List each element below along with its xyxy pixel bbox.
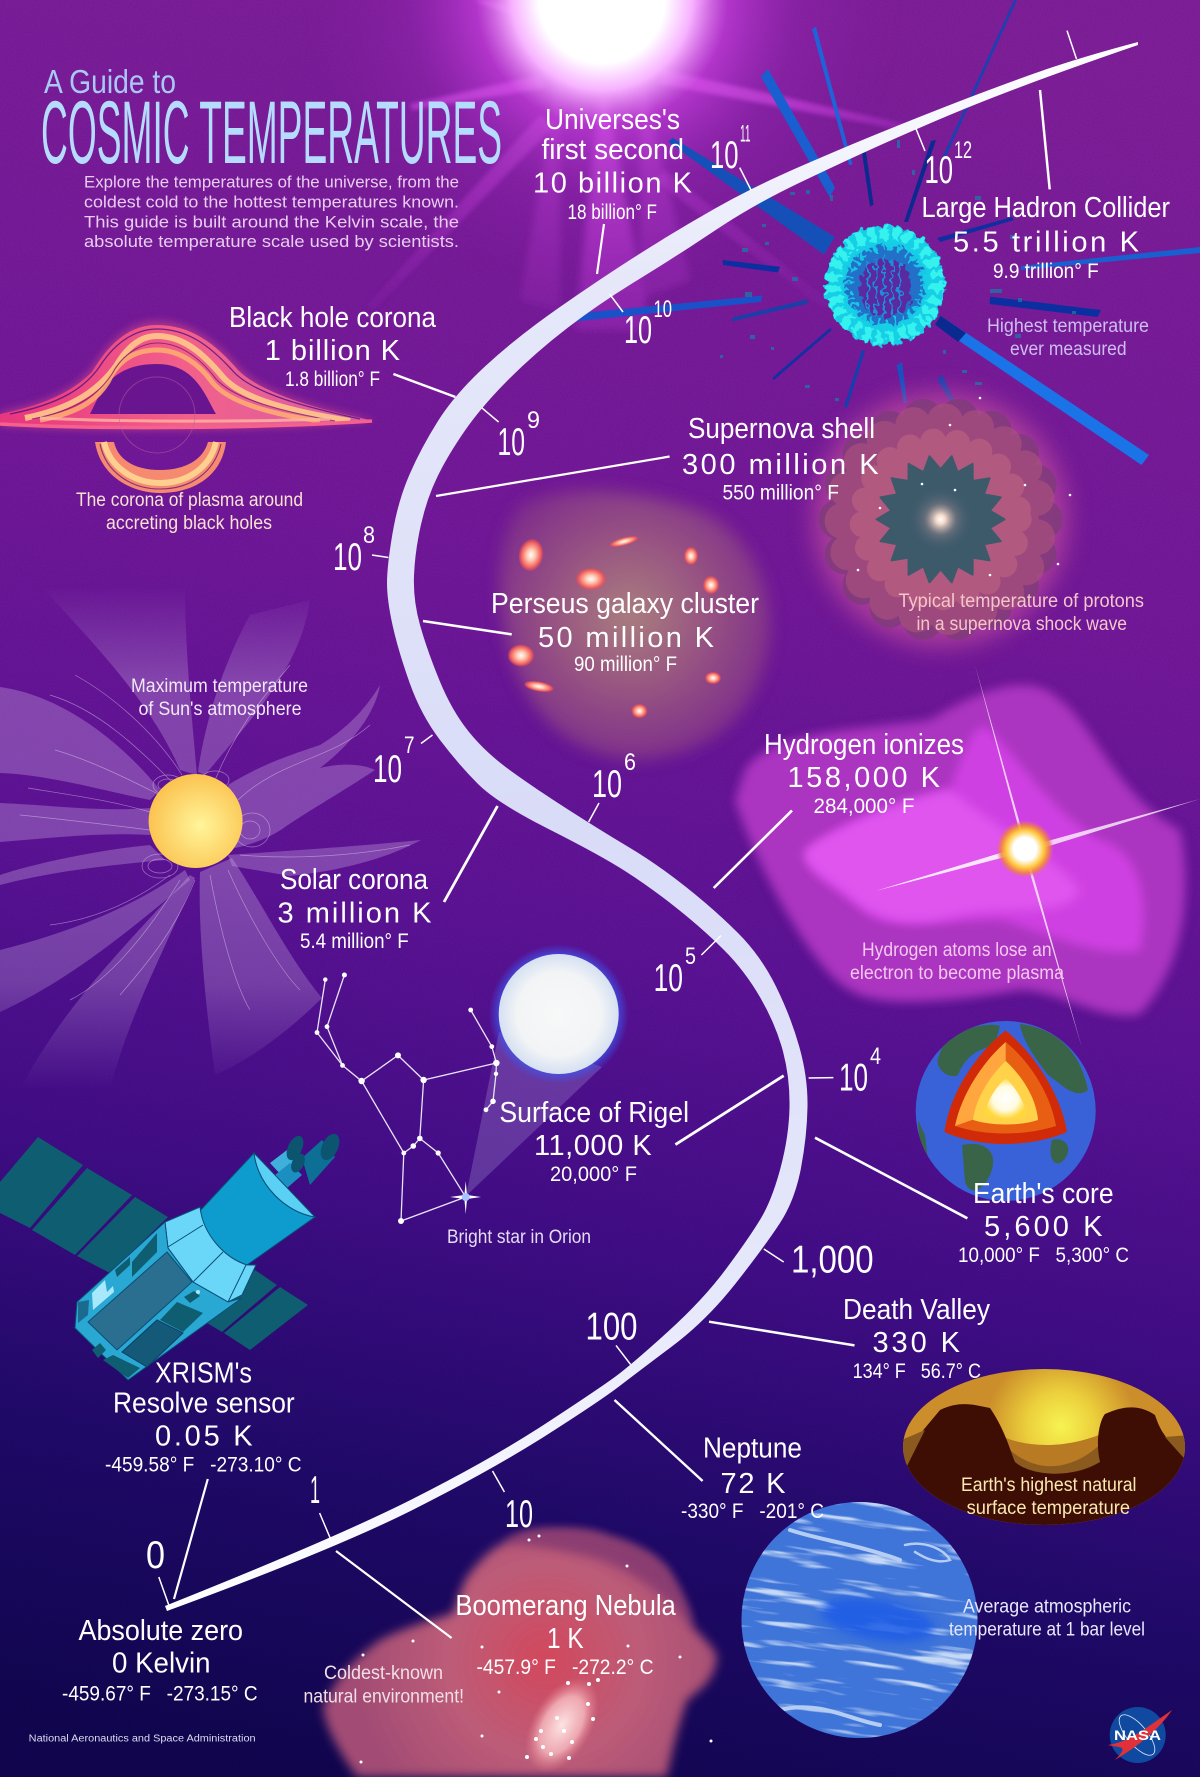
callout: hydrogen ionizes xyxy=(764,729,1064,984)
caption: bright star in Orion: Bright star in Orion xyxy=(447,1227,591,1248)
scale mark: 10^8: 8 xyxy=(363,522,375,549)
scale mark: 10^6: 10 xyxy=(592,763,622,806)
callout: Universe's first second: 18 billion° F xyxy=(568,201,657,224)
leader line: hydrogen ionizes xyxy=(714,810,792,888)
caption xyxy=(987,316,1149,360)
callout: supernova shell: Supernova shell xyxy=(688,413,875,445)
scale mark: 100: 100 xyxy=(586,1306,638,1349)
callout: absolute zero: -459.67° F -273.15° C xyxy=(62,1682,258,1706)
scale mark: 10^9: 9 xyxy=(527,407,540,434)
scale mark: 10^4 xyxy=(809,1043,881,1100)
scale mark: 10^6 xyxy=(589,749,636,822)
caption: temperature at 1 bar level xyxy=(949,1620,1145,1640)
illustration: solar corona and sun xyxy=(0,585,421,1090)
scale mark: 10^5: 5 xyxy=(685,943,696,970)
scale mark: 10^12 with top tick: 10 xyxy=(924,149,953,192)
leader line: Neptune xyxy=(614,1400,703,1481)
caption: ever measured xyxy=(1010,339,1127,360)
callout: Death Valley xyxy=(843,1294,1136,1519)
glare: bright light at the top of the scale xyxy=(302,0,905,330)
caption: natural environment! xyxy=(304,1686,464,1708)
callout: Boomerang Nebula: Boomerang Nebula xyxy=(455,1590,677,1622)
callout: solar corona: 5.4 million° F xyxy=(300,930,409,953)
illustration: Large Hadron Collider particle burst xyxy=(570,0,1200,465)
scale mark: 100 xyxy=(586,1306,638,1364)
title line: A Guide to: A Guide to xyxy=(44,63,176,100)
caption: in a supernova shock wave xyxy=(916,614,1127,635)
callout: XRISM Resolve sensor: Resolve sensor xyxy=(113,1388,295,1420)
callout: Perseus galaxy cluster xyxy=(491,588,759,676)
text: 11 xyxy=(740,121,750,148)
telescope cylinder xyxy=(201,1153,315,1265)
scale mark: 10^11: 10 xyxy=(710,134,738,177)
galaxies xyxy=(508,534,721,718)
callout: supernova shell: 550 million° F xyxy=(722,482,839,504)
scale mark: 10^7 xyxy=(373,732,432,791)
caption: The corona of plasma around xyxy=(76,490,303,511)
caption: Hydrogen atoms lose an xyxy=(862,940,1052,961)
callout: Neptune xyxy=(681,1432,1145,1640)
caption: electron to become plasma xyxy=(850,963,1064,984)
callout: XRISM Resolve sensor xyxy=(105,1358,302,1477)
scale mark: 1 xyxy=(310,1469,331,1540)
illustration: Death Valley xyxy=(890,1369,1190,1530)
callout: Large Hadron Collider: Large Hadron Collider xyxy=(922,192,1170,224)
callout: black hole corona: 1.8 billion° F xyxy=(285,368,380,391)
callout: absolute zero: Absolute zero xyxy=(78,1615,243,1647)
callout: Sun's atmosphere caption xyxy=(131,676,308,720)
callout: XRISM Resolve sensor: -459.58° F -273.10° C xyxy=(105,1454,302,1477)
callout: Earth's core xyxy=(958,1178,1129,1267)
callout: hydrogen ionizes: Hydrogen ionizes xyxy=(764,729,964,761)
callout: Earth's core: 10,000° F 5,300° C xyxy=(958,1244,1129,1267)
icon: NASA logo: NASA xyxy=(1114,1727,1161,1743)
temperature scale ribbon xyxy=(165,42,1138,1611)
callout: hydrogen ionizes: 284,000° F xyxy=(814,795,914,818)
nebula stars xyxy=(360,1534,712,1764)
caption xyxy=(304,1663,464,1708)
collision sphere xyxy=(825,225,945,345)
illustration: supernova shell xyxy=(813,391,1071,647)
caption: Earth's highest natural xyxy=(961,1475,1136,1496)
callout: Universe's first second xyxy=(533,104,693,224)
magnetic field lines xyxy=(20,665,410,1010)
scale mark: 10^4: 4 xyxy=(870,1043,881,1070)
solar panels xyxy=(0,1137,308,1350)
illustration: Rigel star xyxy=(466,944,629,1196)
caption: Highest temperature xyxy=(987,316,1149,337)
scale mark: 10^4: 10 xyxy=(839,1057,868,1100)
core xyxy=(877,456,1005,582)
callout: solar corona: Solar corona xyxy=(280,864,429,896)
scale mark: 10^9: 10 xyxy=(498,421,525,464)
illustration: Neptune xyxy=(742,1502,978,1738)
illustration: XRISM satellite xyxy=(0,1131,343,1380)
callout: XRISM Resolve sensor: XRISM's xyxy=(155,1358,252,1390)
callout: Death Valley: Death Valley xyxy=(843,1294,990,1326)
lens tubes xyxy=(270,1131,343,1188)
callout: Universe's first second: first second xyxy=(542,134,684,166)
callout: black hole corona: 1 billion K xyxy=(265,335,401,367)
callout: black hole corona: Black hole corona xyxy=(229,302,437,334)
scale mark: 1,000: 1,000 xyxy=(791,1239,874,1282)
collar facets xyxy=(165,1207,256,1302)
intro paragraph xyxy=(84,172,459,251)
callout: Universe's first second: 10 billion K xyxy=(533,168,693,200)
scale mark: 10^10 xyxy=(610,294,672,352)
text: COSMIC TEMPERATURES xyxy=(41,82,502,182)
callout: absolute zero: 0 Kelvin xyxy=(112,1648,210,1680)
scale mark: 0 xyxy=(146,1534,169,1606)
intro paragraph: coldest cold to the hottest temperatures known. xyxy=(84,192,459,212)
light beam from Orion xyxy=(466,1032,602,1196)
callout: Neptune: -330° F -201° C xyxy=(681,1500,824,1523)
callout: Neptune: Neptune xyxy=(703,1432,802,1464)
footer: agency name: National Aeronautics and Space Administration xyxy=(29,1734,256,1744)
scale mark: 10^8: 10 xyxy=(333,536,362,579)
caption: Coldest-known xyxy=(324,1663,443,1684)
callout: Boomerang Nebula: -457.9° F -272.2° C xyxy=(476,1656,654,1679)
callout: surface of Rigel: Surface of Rigel xyxy=(499,1097,689,1129)
callout: Earth's core: Earth's core xyxy=(973,1178,1114,1210)
callout: absolute zero xyxy=(62,1615,258,1706)
callout: solar corona: 3 million K xyxy=(278,898,432,930)
scale mark: 10 xyxy=(492,1471,533,1536)
radiator panel xyxy=(88,1252,192,1350)
callout: Perseus galaxy cluster: 50 million K xyxy=(538,622,715,654)
callout: surface of Rigel: 11,000 K xyxy=(534,1130,652,1162)
caption: accreting black holes xyxy=(106,513,272,534)
scale mark: 10^8 xyxy=(333,522,388,579)
callout: Boomerang Nebula: 1 K xyxy=(547,1623,584,1655)
title block xyxy=(41,63,502,251)
callout: black hole corona xyxy=(76,302,437,534)
bright star with spikes xyxy=(876,665,1200,1048)
callout: Death Valley: 134° F 56.7° C xyxy=(853,1360,981,1383)
scale mark: 1,000 xyxy=(764,1239,874,1282)
scale mark: 10^6: 6 xyxy=(624,749,636,776)
callout: hydrogen ionizes: 158,000 K xyxy=(788,762,941,794)
callout: Perseus galaxy cluster: Perseus galaxy cluster xyxy=(491,588,759,620)
callout: Large Hadron Collider: 5.5 trillion K xyxy=(953,226,1140,258)
callout: solar corona xyxy=(278,864,432,953)
leader line: black hole corona xyxy=(393,374,455,397)
leader line: Earth's core xyxy=(815,1138,967,1218)
caption: Average atmospheric xyxy=(963,1596,1131,1618)
illustration: Perseus galaxy cluster xyxy=(499,490,771,760)
leader line: XRISM Resolve sensor xyxy=(174,1479,208,1599)
illustration: Orion constellation xyxy=(315,972,500,1224)
scale mark: 10^5: 10 xyxy=(654,957,683,1000)
caption: surface temperature xyxy=(967,1498,1130,1519)
callout: Sun's atmosphere caption: Maximum temperature xyxy=(131,676,308,697)
callout: Large Hadron Collider: 9.9 trillion° F xyxy=(993,260,1099,283)
intro paragraph: absolute temperature scale used by scientists. xyxy=(84,232,459,251)
callout: surface of Rigel xyxy=(499,1097,689,1186)
scale mark: 10^7: 7 xyxy=(404,732,414,759)
sun disc xyxy=(149,774,243,868)
caption xyxy=(898,591,1144,635)
streamers xyxy=(0,585,421,1090)
Rigel marker star xyxy=(450,1181,481,1214)
leader line: Death Valley xyxy=(709,1322,854,1345)
scale mark: 10^10: 10 xyxy=(654,296,672,323)
caption xyxy=(961,1475,1136,1519)
bus windows and hatches xyxy=(78,1233,203,1378)
callout: supernova shell: 300 million K xyxy=(682,449,879,481)
leader line: Universe's first second xyxy=(597,224,604,274)
leader line: Large Hadron Collider xyxy=(1040,90,1050,189)
callout: Death Valley: 330 K xyxy=(872,1327,961,1359)
intro paragraph: This guide is built around the Kelvin scale, the xyxy=(84,212,459,232)
scale mark: 1: 1 xyxy=(310,1469,320,1512)
callout: Boomerang Nebula xyxy=(304,1590,677,1708)
callout: Sun's atmosphere caption: of Sun's atmosphere xyxy=(138,699,302,720)
scale mark: 0: 0 xyxy=(146,1534,165,1577)
leader line: Perseus galaxy cluster xyxy=(423,621,512,634)
scale mark: 10^12 with top tick xyxy=(916,31,1076,192)
callout: Large Hadron Collider xyxy=(922,192,1170,360)
callout: surface of Rigel: 20,000° F xyxy=(550,1163,637,1186)
scale mark: 10^10: 10 xyxy=(624,309,652,352)
leader line: Boomerang Nebula xyxy=(336,1551,452,1638)
caption xyxy=(76,490,303,534)
caption: Typical temperature of protons xyxy=(898,591,1144,612)
caption xyxy=(949,1596,1145,1640)
illustration: Boomerang Nebula xyxy=(323,1530,717,1777)
scale mark: 10^9 xyxy=(482,407,540,464)
scale mark: 10^5 xyxy=(654,936,721,1000)
spacecraft bus xyxy=(75,1222,242,1380)
illustration: hydrogen plasma cloud xyxy=(735,665,1200,1048)
callout: Neptune: 72 K xyxy=(720,1468,786,1500)
scale mark: 10: 10 xyxy=(505,1493,533,1536)
leader line: solar corona xyxy=(444,806,498,902)
scale mark: 10^11 xyxy=(710,121,751,190)
callout: Earth's core: 5,600 K xyxy=(984,1211,1103,1243)
illustration: Earth cross-section xyxy=(916,1021,1096,1201)
scale mark: 10^12 with top tick: 12 xyxy=(954,137,972,164)
illustration: black hole corona xyxy=(0,321,375,493)
leader line: surface of Rigel xyxy=(675,1076,784,1145)
scale mark: 10^7: 10 xyxy=(373,748,402,791)
intro paragraph: Explore the temperatures of the universe, from the xyxy=(84,172,459,192)
icon: NASA logo xyxy=(1108,1707,1172,1763)
callout: Universe's first second: Universes's xyxy=(545,104,680,136)
callout: supernova shell xyxy=(682,413,1144,635)
leader line: supernova shell xyxy=(436,456,670,496)
callout: Perseus galaxy cluster: 90 million° F xyxy=(574,653,677,676)
caption xyxy=(850,940,1064,984)
callout: XRISM Resolve sensor: 0.05 K xyxy=(155,1421,253,1453)
